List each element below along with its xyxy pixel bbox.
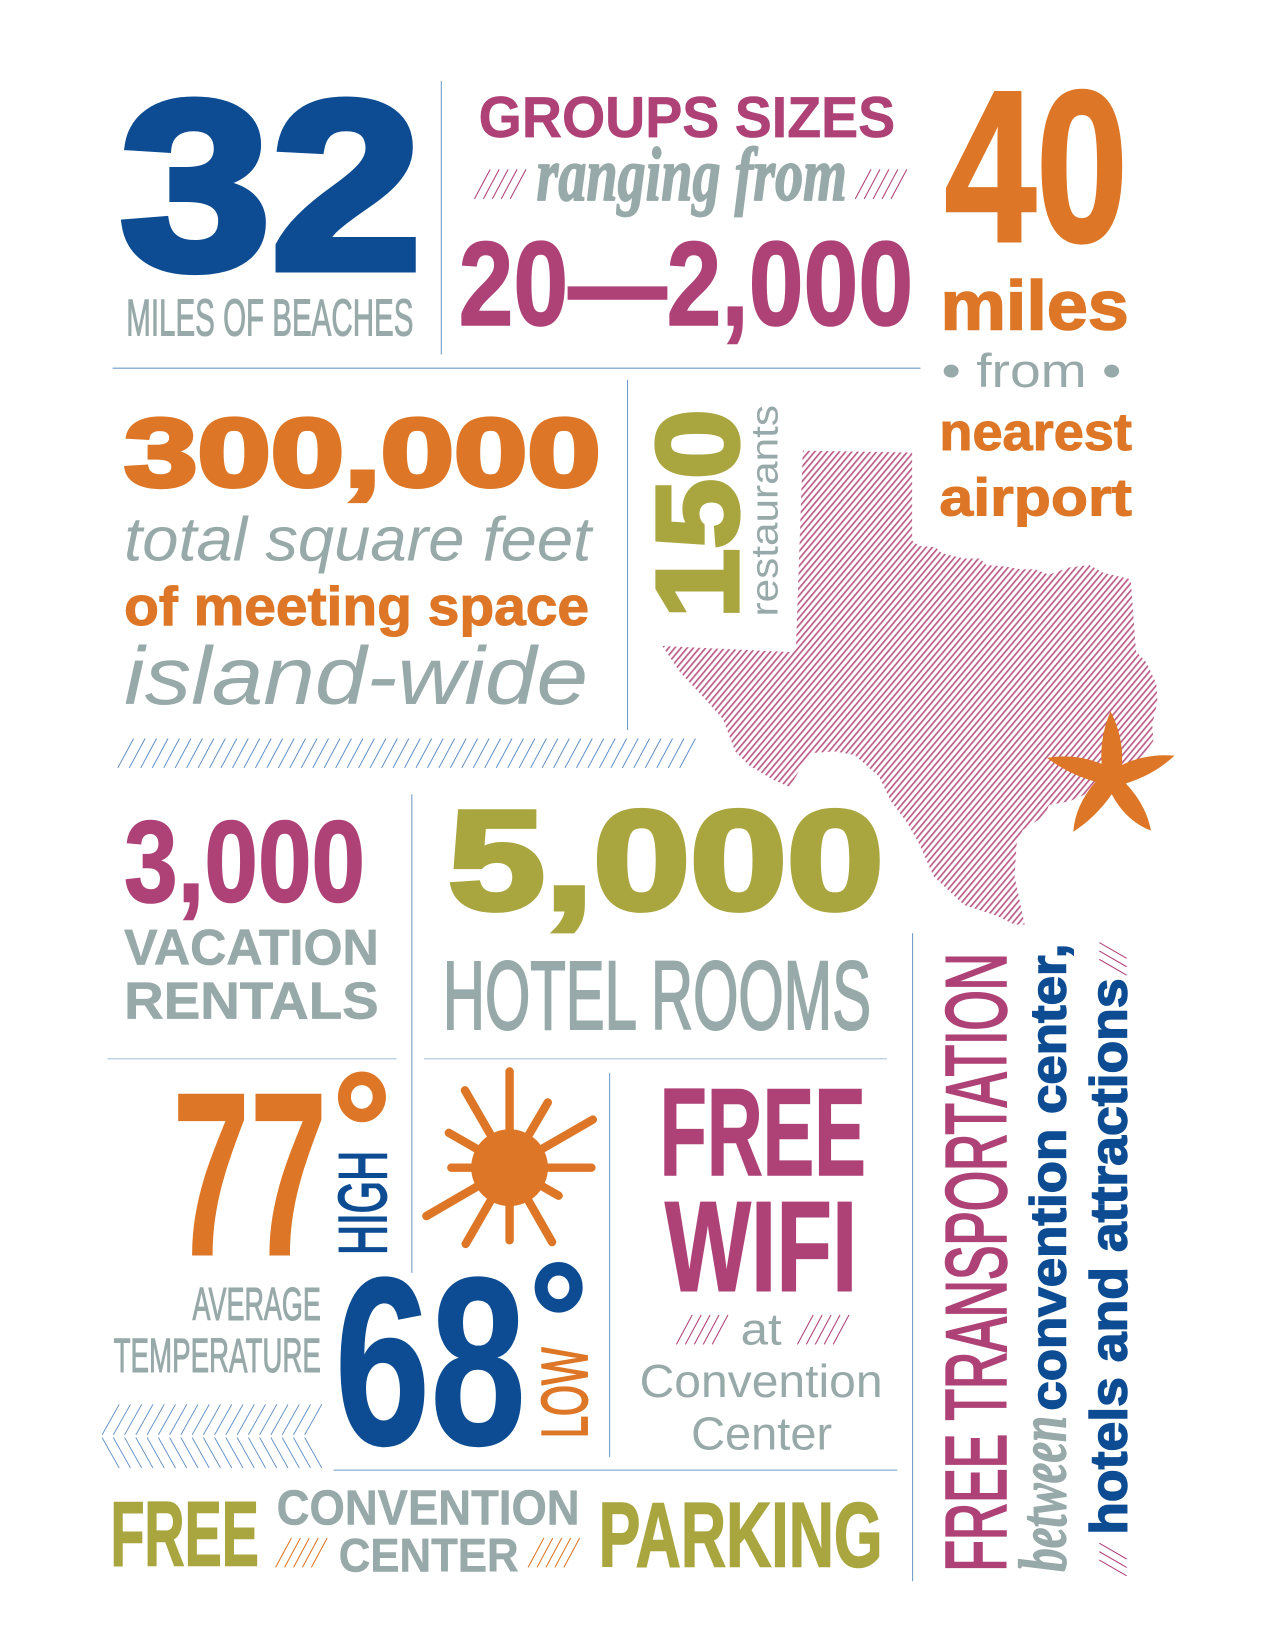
stat: 5,000 hotel rooms: 5,000 — [448, 781, 884, 939]
stat: 5,000 hotel rooms — [443, 781, 884, 1050]
label: average temperature: AVERAGE — [193, 1278, 321, 1330]
stat: 300,000 square feet of meeting space: total square feet — [124, 506, 594, 575]
stat: 3,000 vacation rentals: RENTALS — [124, 971, 379, 1029]
stat: 32 miles of beaches: MILES OF BEACHES — [126, 289, 413, 347]
stat: 40 miles from nearest airport: • from • — [942, 345, 1121, 398]
stat: free transportation: between — [1006, 1416, 1081, 1572]
stat: 300,000 square feet of meeting space: 300,000 — [124, 398, 601, 507]
stat: free transportation: FREE TRANSPORTATION — [930, 953, 1025, 1572]
stat: group sizes 20 to 2,000: GROUPS SIZES — [479, 86, 895, 150]
stat: group sizes 20 to 2,000: ranging from — [537, 134, 847, 217]
stat: free wifi at convention center — [640, 1064, 883, 1460]
stat: 40 miles from nearest airport: miles — [940, 266, 1129, 344]
banner: free convention center parking: CONVENTION — [277, 1480, 580, 1535]
icon: starfish — [1047, 711, 1174, 832]
stat: 77 degree high: HIGH — [326, 1151, 401, 1255]
stat: free wifi at convention center: FREE — [660, 1064, 866, 1202]
stat: 40 miles from nearest airport: nearest — [939, 403, 1132, 462]
hatch band: blue — [118, 738, 695, 768]
stat: 150 restaurants: restaurants — [744, 405, 786, 616]
icon: sun — [426, 1071, 593, 1244]
banner: free convention center parking — [110, 1480, 883, 1586]
stat: free transportation: hotels and attractions — [1080, 978, 1138, 1535]
stat: 77 degree high: 77 — [173, 1045, 327, 1305]
label: average temperature — [114, 1278, 321, 1383]
stat: 300,000 square feet of meeting space — [124, 398, 601, 722]
banner: free convention center parking: FREE — [110, 1483, 259, 1585]
panel dividers — [107, 81, 920, 1581]
stat: 300,000 square feet of meeting space: island-wide — [124, 631, 588, 722]
stat: 5,000 hotel rooms: HOTEL ROOMS — [443, 940, 871, 1050]
hatch: blue chevrons — [102, 1404, 322, 1468]
stat: 150 restaurants: 150 — [632, 409, 762, 619]
stat: 68 degree low: 68 — [335, 1227, 526, 1495]
stat: free wifi at convention center: Center — [691, 1408, 832, 1460]
stat: 68 degree low: LOW — [528, 1347, 601, 1438]
stat: group sizes 20 to 2,000: 20—2,000 — [459, 217, 913, 351]
stat: 300,000 square feet of meeting space: of meeting space — [124, 575, 589, 637]
stat: free transportation: convention center, — [1020, 944, 1077, 1411]
stat: 3,000 vacation rentals: VACATION — [124, 919, 379, 976]
banner: free convention center parking: PARKING — [599, 1484, 883, 1586]
stat: 32 miles of beaches: 32 — [120, 51, 422, 319]
stat: free transportation — [930, 943, 1138, 1576]
stat: 40 miles from nearest airport — [939, 46, 1132, 527]
stat: 3,000 vacation rentals — [124, 797, 379, 1029]
banner: free convention center parking: CENTER — [339, 1530, 519, 1583]
stat: 68 degree low: ° — [529, 1231, 588, 1407]
stat: 77 degree high: ° — [332, 1040, 391, 1216]
map: Texas hatched shape — [657, 447, 1162, 926]
stat: 40 miles from nearest airport: airport — [939, 468, 1132, 527]
stat: 3,000 vacation rentals: 3,000 — [124, 797, 365, 927]
stat: free wifi at convention center: WIFI — [665, 1176, 857, 1319]
stat: free wifi at convention center: at — [741, 1305, 782, 1354]
label: average temperature: TEMPERATURE — [114, 1329, 321, 1383]
stat: group sizes 20 to 2,000 — [459, 86, 913, 351]
stat: free wifi at convention center: Convention — [640, 1355, 883, 1407]
stat: 40 miles from nearest airport: 40 — [945, 46, 1128, 287]
